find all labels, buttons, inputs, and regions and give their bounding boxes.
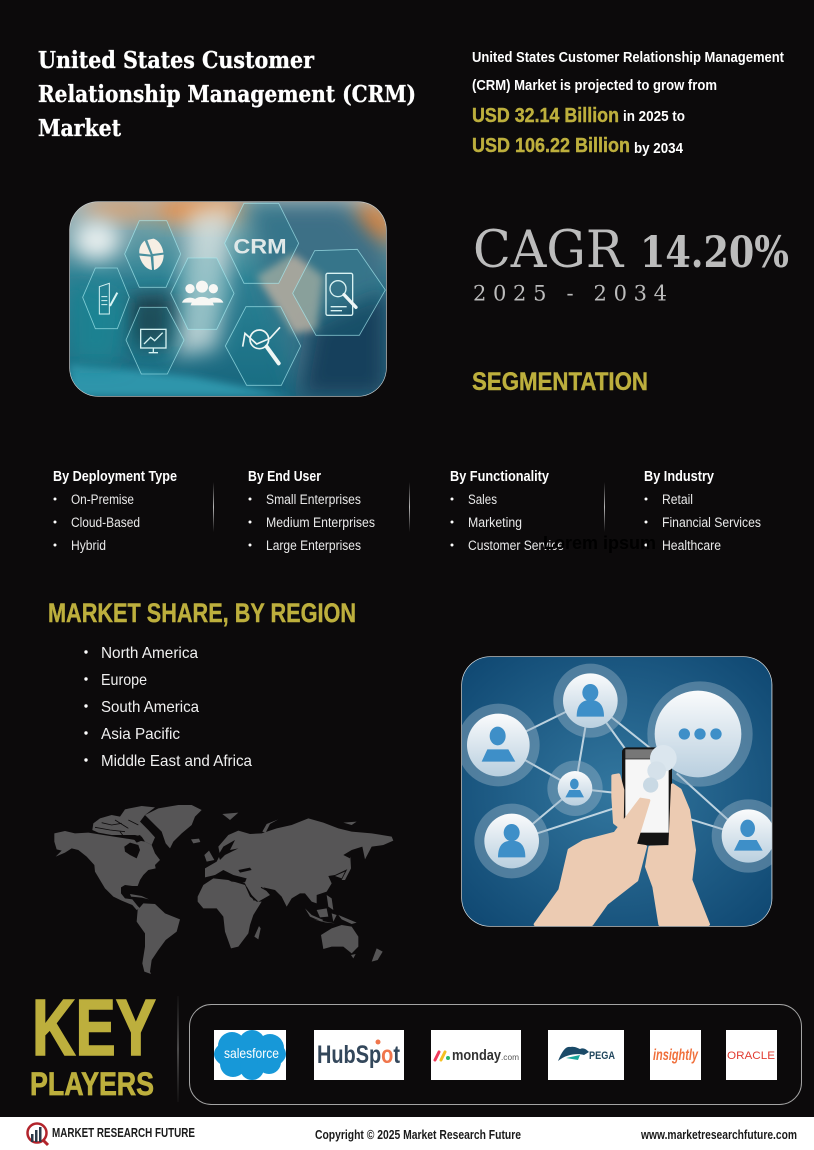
logo: insightly: insightly — [653, 1047, 699, 1064]
icon: document — [99, 283, 117, 314]
icon: analytics magnifier — [243, 327, 280, 363]
logo: pega — [548, 1030, 624, 1080]
segment: functionality — [450, 468, 564, 553]
logo: monday: .com — [501, 1053, 519, 1062]
logo: monday: monday — [452, 1047, 502, 1064]
region list: Middle East and Africa — [101, 753, 252, 770]
icon: people — [182, 281, 223, 305]
logo: pega: PEGA — [589, 1050, 615, 1062]
person nodes — [467, 673, 775, 868]
logo: hubspot — [314, 1030, 404, 1080]
CAGR figure: CAGR — [473, 221, 625, 280]
key players heading: KEY — [32, 983, 156, 1072]
segmentation heading: SEGMENTATION — [472, 368, 648, 396]
title: Relationship Management (CRM) — [38, 81, 416, 108]
segment: functionality: Customer Service — [468, 538, 564, 553]
speech bubble — [643, 691, 741, 793]
segment: end user: By End User — [248, 468, 321, 485]
CRM hexagon image — [69, 197, 393, 397]
footer copyright: Copyright © 2025 Market Research Future — [315, 1128, 521, 1142]
market projection text: (CRM) Market is projected to grow from — [472, 78, 717, 94]
logo: hubspot: HubSpot — [317, 1041, 401, 1069]
region list: North America — [101, 645, 198, 662]
world map — [54, 805, 393, 974]
market projection text: in 2025 to — [623, 109, 685, 125]
key players panel — [190, 1004, 802, 1104]
segment: industry: Healthcare — [662, 538, 721, 553]
CAGR figure: 14.20% — [640, 228, 789, 278]
region list — [84, 645, 252, 770]
market projection text — [472, 50, 784, 157]
CAGR figure: 2025 - 2034 — [473, 282, 667, 306]
logo: insightly — [650, 1030, 701, 1080]
segment: end user: Medium Enterprises — [266, 515, 375, 530]
segment: deployment type: Hybrid — [71, 538, 106, 553]
segment: deployment type: Cloud-Based — [71, 515, 140, 530]
CAGR figure — [473, 221, 789, 306]
network lines — [525, 711, 728, 834]
hexagon outlines — [83, 203, 385, 385]
footer logo icon — [28, 1124, 48, 1145]
title — [38, 47, 416, 142]
segment: industry — [644, 468, 761, 553]
market projection text: USD 106.22 Billion — [472, 134, 630, 157]
segment: deployment type — [53, 468, 177, 553]
market projection text: by 2034 — [634, 141, 683, 157]
key players heading: PLAYERS — [30, 1066, 154, 1102]
logo: salesforce — [214, 1030, 286, 1080]
market projection text: USD 32.14 Billion — [472, 104, 619, 127]
footer bar — [0, 1117, 814, 1150]
region list: South America — [101, 699, 199, 716]
key players heading — [30, 983, 156, 1102]
segment: deployment type: On-Premise — [71, 492, 134, 507]
region list: Europe — [101, 672, 147, 689]
smartphone network image — [457, 656, 785, 927]
icon: pie chart — [139, 239, 164, 270]
market share heading: MARKET SHARE, BY REGION — [48, 598, 356, 628]
region list: Asia Pacific — [101, 726, 180, 743]
stray placeholder text: Lorem ipsum — [543, 533, 656, 553]
segment: industry: Financial Services — [662, 515, 761, 530]
segment: functionality: Sales — [468, 492, 497, 507]
segment: end user: Small Enterprises — [266, 492, 361, 507]
icon: clipboard with magnifier — [326, 273, 356, 315]
title: Market — [38, 115, 121, 142]
phone — [622, 747, 672, 845]
segment: end user: Large Enterprises — [266, 538, 361, 553]
segment: industry: By Industry — [644, 468, 715, 485]
logo: salesforce: salesforce — [224, 1045, 279, 1061]
segment: functionality: By Functionality — [450, 468, 550, 485]
segment: end user — [248, 468, 375, 553]
logo: monday — [431, 1030, 521, 1080]
segment: deployment type: By Deployment Type — [53, 468, 177, 485]
icon: monitor chart — [141, 329, 166, 353]
hands — [535, 775, 708, 924]
segment: functionality: Marketing — [468, 515, 522, 530]
segment: industry: Retail — [662, 492, 693, 507]
node halos — [457, 664, 785, 878]
market projection text: United States Customer Relationship Management — [472, 50, 784, 66]
logo: oracle — [726, 1030, 777, 1080]
footer brand: MARKET RESEARCH FUTURE — [52, 1126, 195, 1140]
label: CRM: CRM — [233, 234, 287, 258]
logo: oracle: ORACLE — [727, 1050, 775, 1062]
title: United States Customer — [38, 47, 315, 74]
